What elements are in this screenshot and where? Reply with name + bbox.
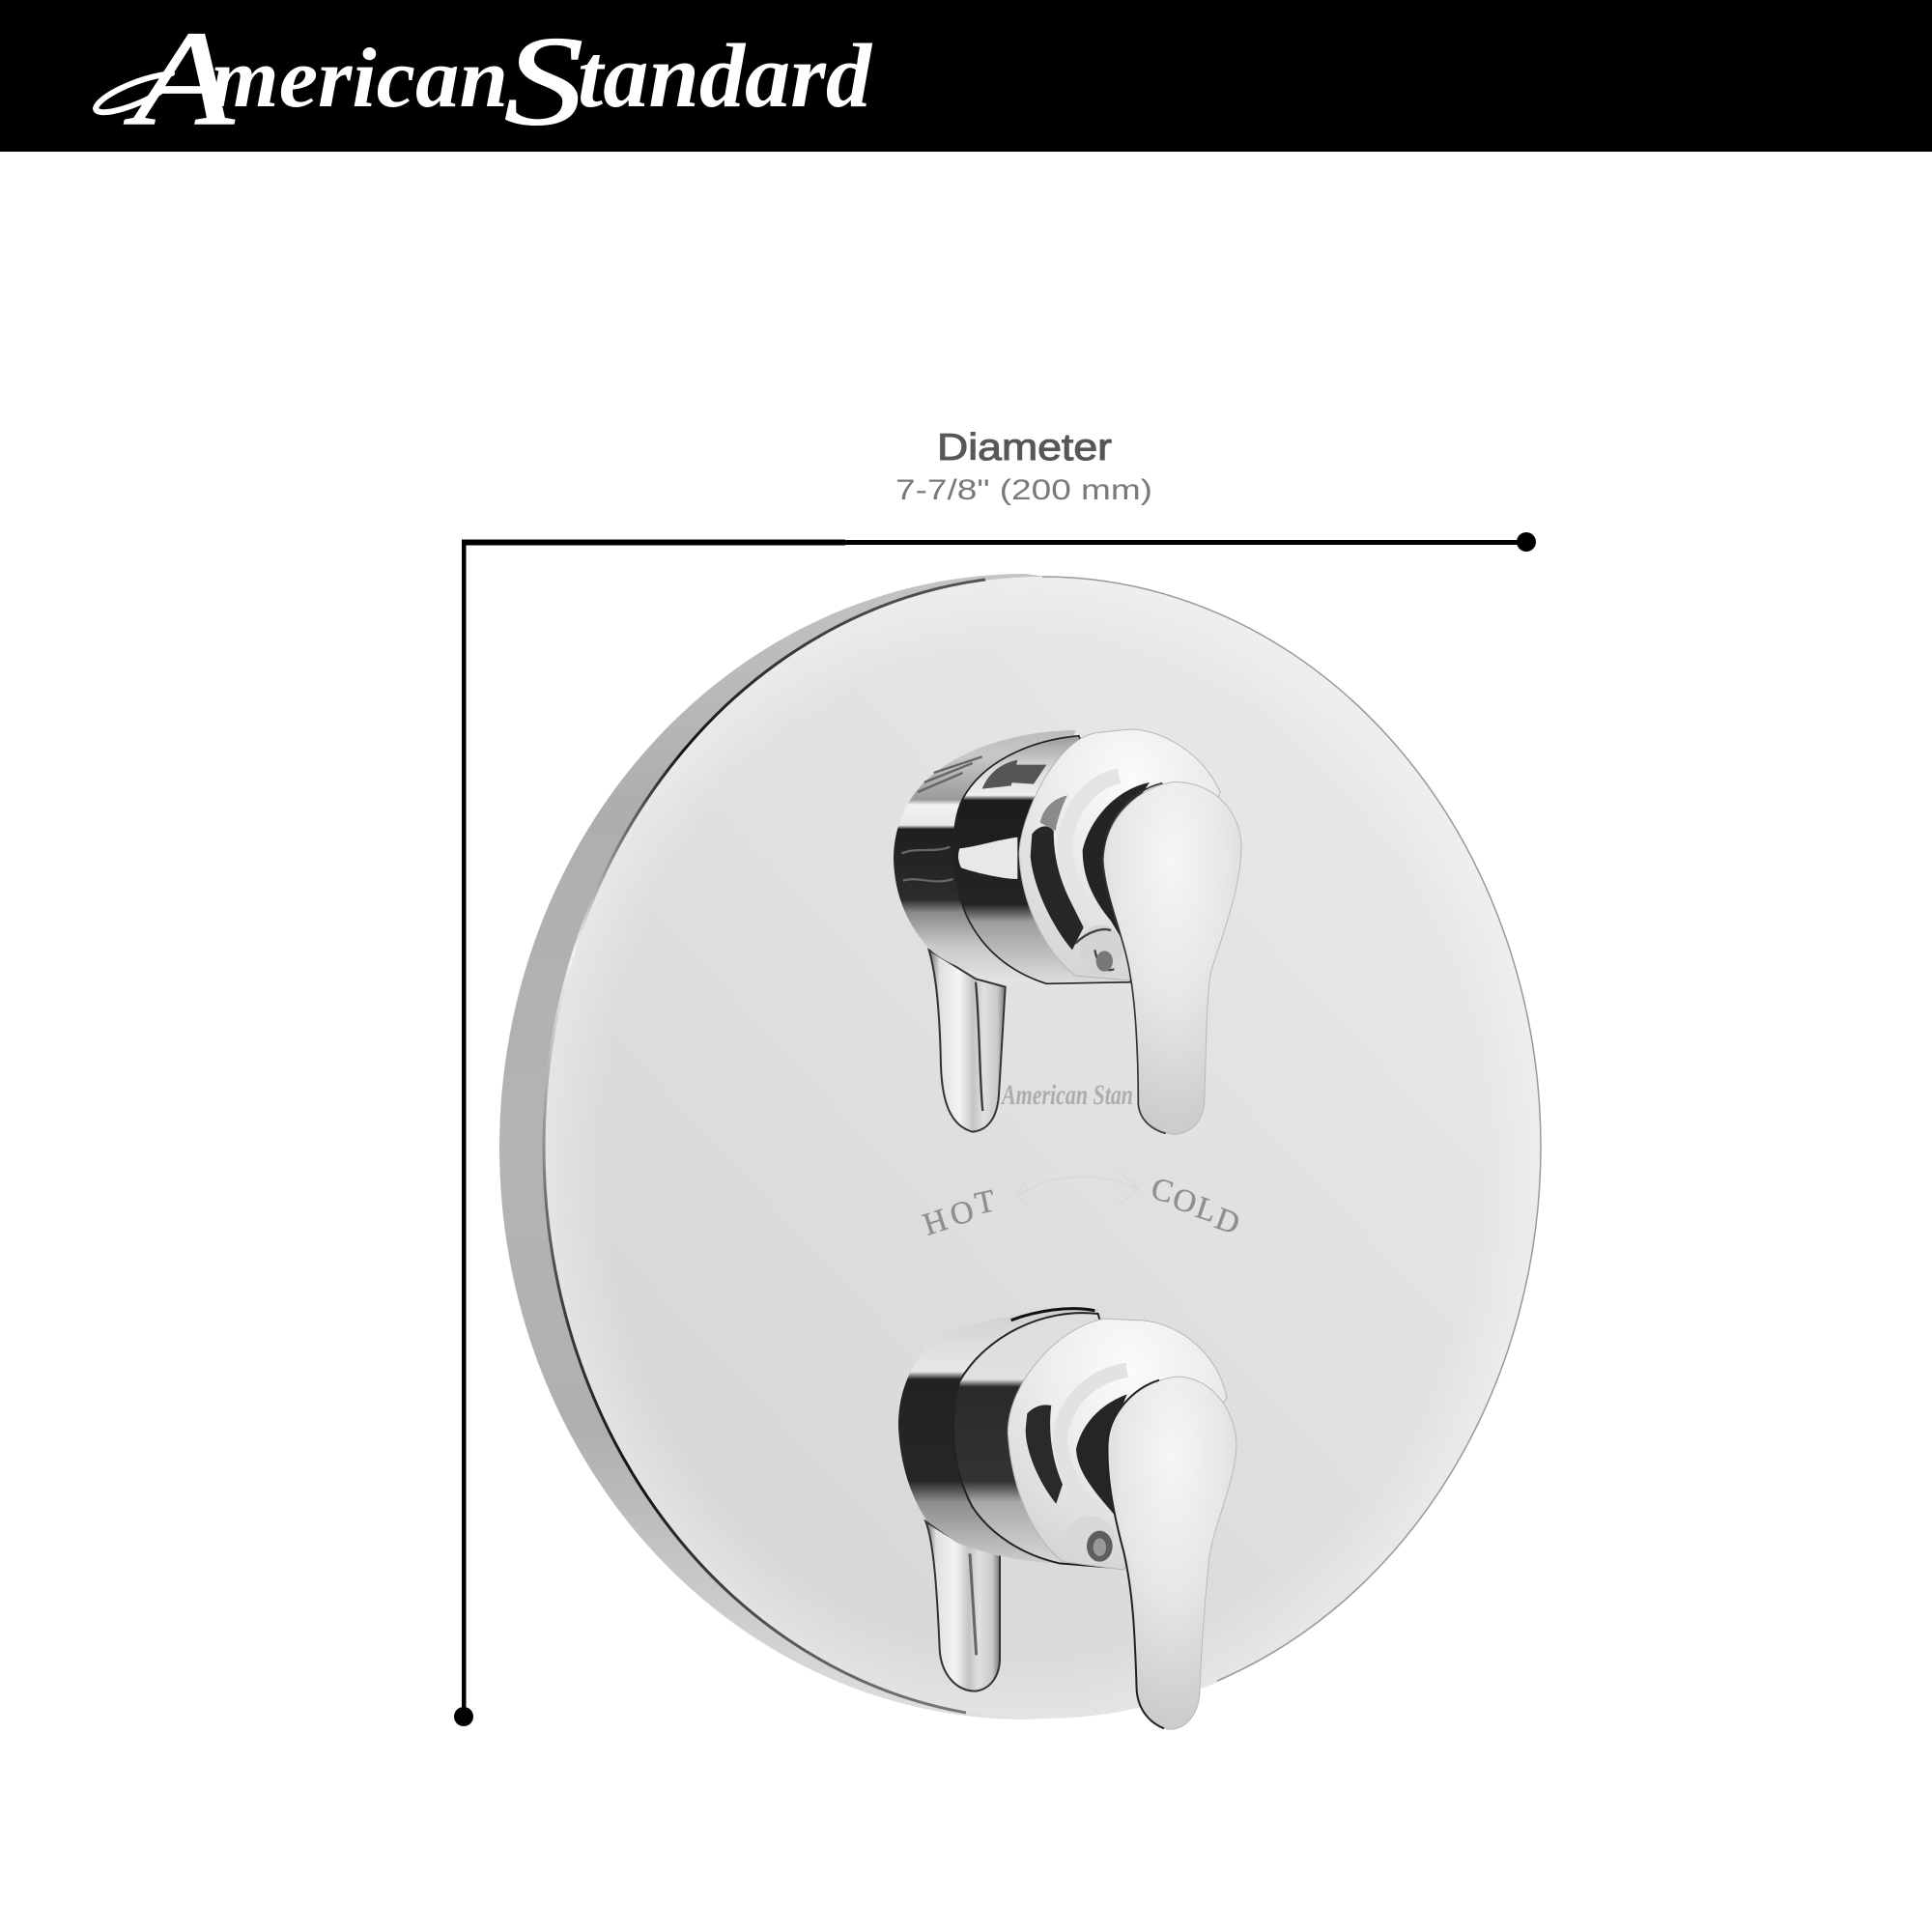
logo: American Standard: merican — [211, 32, 508, 126]
lower valve screw detail — [1065, 1516, 1115, 1562]
lower front escutcheon — [1008, 1319, 1227, 1570]
dimension line: horizontal diameter bracket — [462, 532, 1536, 552]
upper spindle collar — [1065, 776, 1119, 925]
upper lever handle — [1103, 781, 1241, 1134]
upper escutcheon dark recess — [1031, 826, 1084, 950]
product: round valve trim plate — [499, 574, 1541, 1719]
upper band reflection stripes — [901, 756, 982, 881]
engraved label: HOT: HOT — [919, 1183, 998, 1243]
logo: American Standard — [96, 4, 873, 154]
plate groove line — [544, 580, 985, 1713]
lower rear lever — [925, 1521, 1000, 1691]
header bar — [0, 0, 1932, 152]
plate side rim — [499, 574, 1053, 1719]
watermark logo text: American Stan — [1001, 1079, 1133, 1111]
heading: Diameter: Diameter — [937, 427, 1112, 469]
lower spindle collar — [1060, 1370, 1127, 1517]
lower handle assembly — [898, 1309, 1236, 1729]
engraved label: COLD: COLD — [1148, 1172, 1244, 1242]
plate face edge glow — [544, 577, 1541, 1719]
lower body rear band — [898, 1309, 1127, 1570]
engraved arrow: hot to cold — [1015, 1173, 1138, 1208]
dimension value: 7-7/8" (200 mm) — [895, 474, 1152, 506]
logo: American Standard: A — [124, 4, 235, 154]
plate right outline — [1042, 577, 1541, 1681]
upper spindle dark recess — [1083, 782, 1150, 953]
upper rear lever — [929, 950, 1006, 1132]
logo: American Standard: tandard — [578, 26, 873, 127]
upper band highlight — [958, 838, 1017, 879]
lower body middle band — [953, 1313, 1127, 1568]
upper handle assembly — [894, 729, 1241, 1134]
lower escutcheon dark recess — [1026, 1405, 1063, 1504]
upper body middle band — [953, 736, 1130, 983]
lower lever handle — [1107, 1377, 1236, 1729]
lower band top shadow line — [1011, 1309, 1094, 1321]
plate front face — [544, 577, 1541, 1719]
upper valve screw detail — [1075, 924, 1123, 975]
logo: American Standard: S — [504, 10, 583, 152]
lower spindle dark recess — [1076, 1394, 1127, 1529]
upper body rear band — [894, 730, 1130, 987]
upper front escutcheon — [1019, 729, 1220, 980]
upper recess top reflection — [1040, 795, 1067, 831]
dimension line: vertical diameter bracket — [454, 539, 473, 1726]
upper band top patches — [982, 760, 1046, 789]
